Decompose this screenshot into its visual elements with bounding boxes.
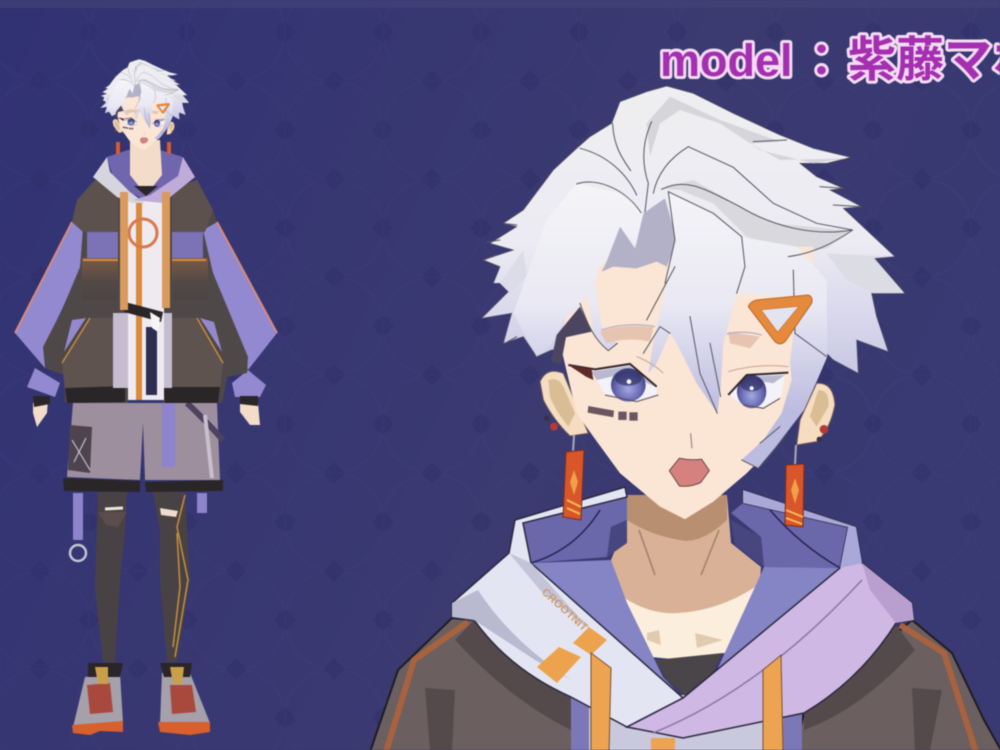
right earring bbox=[785, 445, 804, 527]
left earring bbox=[563, 435, 584, 520]
hood inner right bbox=[731, 503, 848, 568]
model credit text: model bbox=[660, 35, 793, 86]
model credit text: ： bbox=[799, 35, 844, 86]
small head bbox=[100, 59, 189, 150]
hood inner left bbox=[523, 497, 627, 563]
drawstrings bbox=[591, 653, 611, 750]
small earrings bbox=[116, 142, 171, 154]
shirt area under scarf bbox=[571, 695, 802, 750]
hood rim left bbox=[452, 487, 683, 727]
jacket right bbox=[795, 620, 1000, 750]
hands bbox=[33, 396, 260, 427]
hood text: CROOTNIT bbox=[539, 586, 590, 634]
small full-body figure bbox=[15, 59, 277, 735]
shorts bbox=[63, 403, 223, 561]
legs bbox=[95, 492, 190, 662]
large head bbox=[482, 86, 905, 519]
shirt bbox=[113, 198, 172, 400]
hood rim right bbox=[627, 490, 914, 738]
jacket torso bbox=[43, 180, 248, 403]
jacket left bbox=[370, 618, 590, 750]
shoes bbox=[72, 663, 210, 735]
large bust: body bbox=[370, 487, 1000, 750]
neck and hood bbox=[93, 140, 195, 310]
neck bbox=[611, 495, 761, 630]
black tee bbox=[655, 653, 723, 697]
sleeves bbox=[15, 222, 277, 397]
chest bbox=[623, 587, 755, 660]
